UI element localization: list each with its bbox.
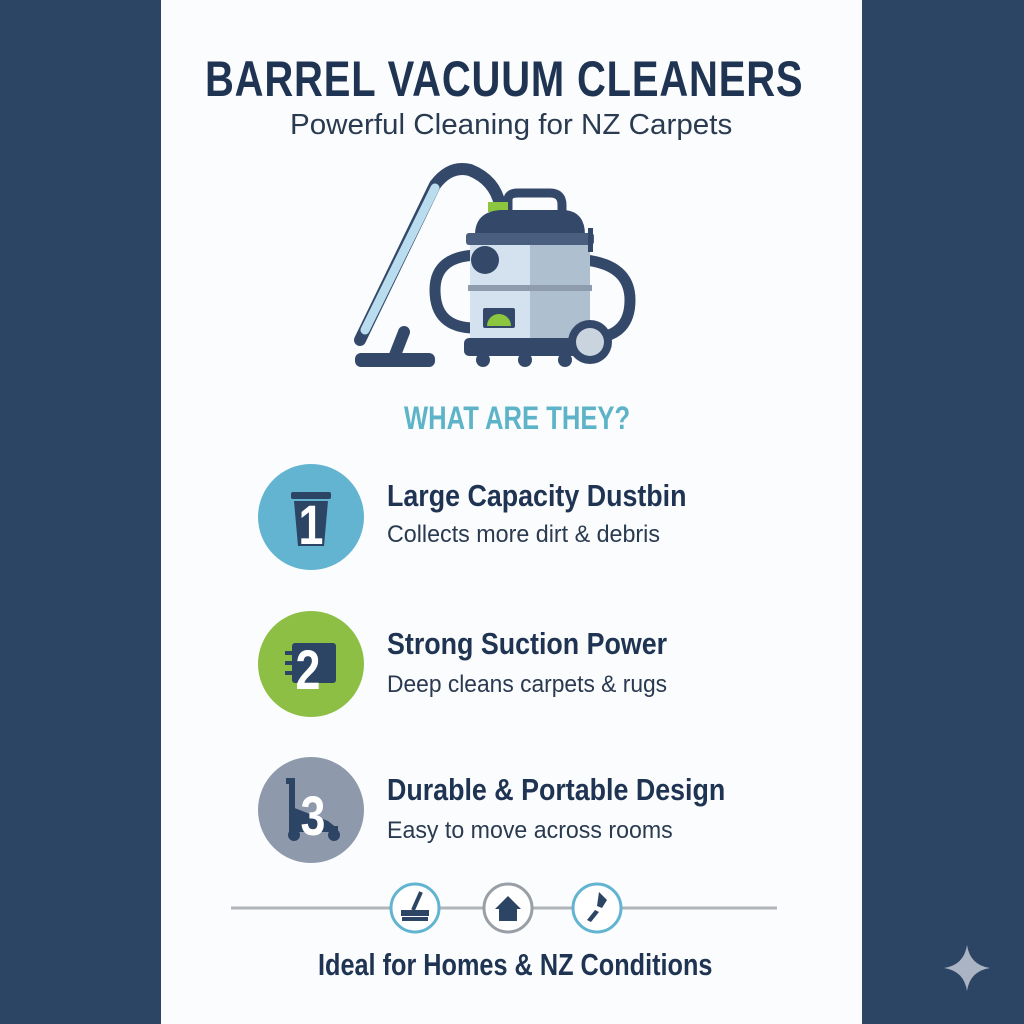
item 1: Collects more dirt & debris <box>387 521 660 548</box>
item 3: Easy to move across rooms <box>387 817 673 844</box>
icon: house <box>484 884 532 932</box>
icon: motor 2 <box>258 611 364 717</box>
icon: brush <box>391 884 439 932</box>
item 3 <box>258 757 725 863</box>
item 1 <box>258 464 687 570</box>
icon: NZ map <box>573 884 621 932</box>
heading: what are they: WHAT ARE THEY? <box>404 400 630 436</box>
icon: dustbin 1: 1 <box>299 493 323 556</box>
icon: sparkle <box>944 945 990 991</box>
item 2 <box>258 611 667 717</box>
text: strong suction: Strong Suction Power <box>387 626 667 661</box>
text: durable portable: Durable & Portable Design <box>387 772 725 807</box>
subtitle: Powerful Cleaning for NZ Carpets <box>290 109 732 141</box>
item 2: Deep cleans carpets & rugs <box>387 671 667 698</box>
bottom icon row <box>231 882 777 934</box>
icon: trolley 3: 3 <box>301 784 325 847</box>
footer text: Ideal for Homes & NZ Conditions <box>318 947 712 982</box>
icon: dustbin 1 <box>258 464 364 570</box>
icon: motor 2: 2 <box>296 638 320 701</box>
text: large capacity: Large Capacity Dustbin <box>387 478 687 513</box>
title: BARREL VACUUM CLEANERS <box>205 51 803 107</box>
panel: white center <box>161 0 862 1024</box>
illustration: barrel vacuum <box>354 163 636 367</box>
icon: trolley 3 <box>258 757 364 863</box>
